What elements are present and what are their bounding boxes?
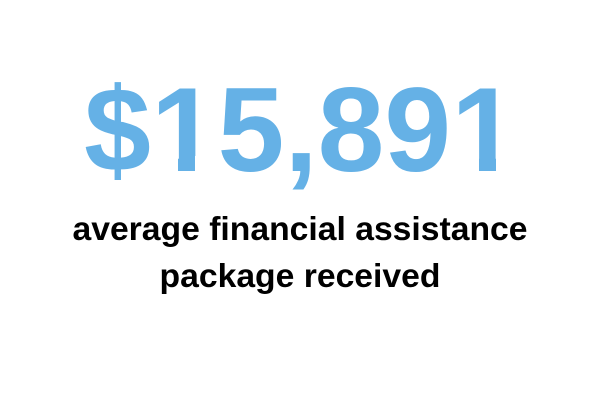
- caption line 2: package received: [160, 257, 440, 295]
- caption: [72, 210, 528, 295]
- big number: $15,891: [84, 63, 518, 197]
- caption line 1: average financial assistance: [72, 210, 528, 248]
